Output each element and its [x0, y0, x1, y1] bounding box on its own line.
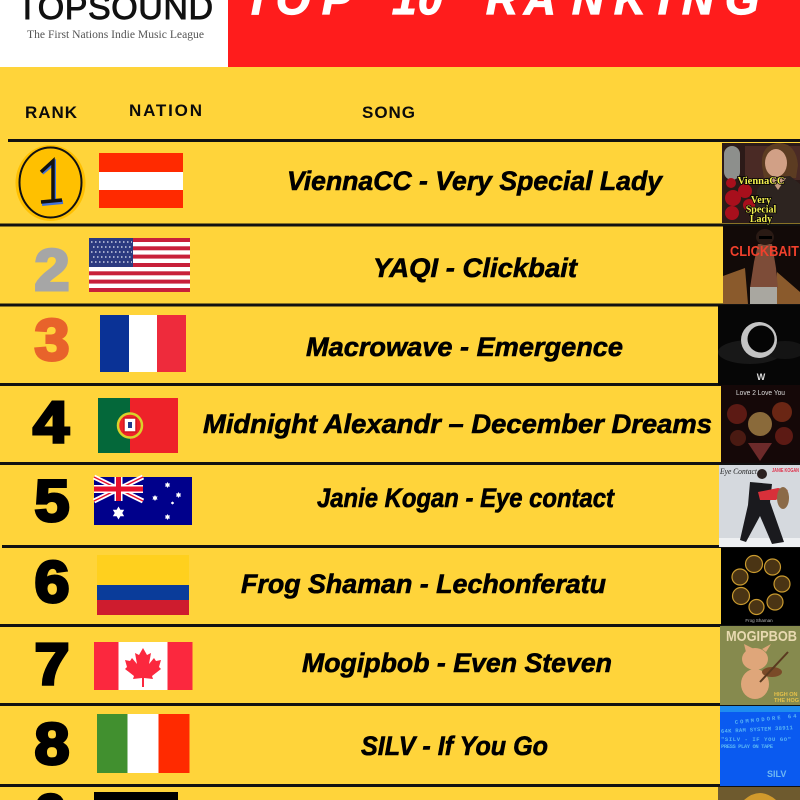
song: ViennaCC: ViennaCC - Very Special Lady: [287, 166, 663, 196]
row 7: Mogipbob: [34, 626, 800, 705]
column headers: RANK: [25, 103, 78, 122]
album art: ViennaCC: Special: [746, 204, 776, 216]
row 4: Midnight Alexandr: [33, 385, 800, 463]
rank 3: 3: [34, 308, 70, 373]
song: Janie Kogan: Janie Kogan - Eye contact: [317, 483, 615, 513]
album art: Emergence: W: [757, 372, 766, 382]
logo panel: The First Nations Indie Music League: [27, 27, 204, 41]
rank 5: 5: [34, 469, 70, 534]
album art: Eye Contact: Eye Contact: [719, 467, 758, 476]
song: Midnight Alexandr: Midnight Alexandr – December Dreams: [203, 409, 712, 439]
flag: Italy: [97, 714, 190, 773]
song: Frog Shaman: Frog Shaman - Lechonferatu: [241, 569, 606, 599]
song: SILV: SILV - If You Go: [361, 731, 548, 761]
album art: If You Go: [720, 706, 800, 786]
album art: Clickbait: [723, 226, 800, 304]
row 9: album art, partly visible: [718, 787, 800, 800]
row 1: ViennaCC: [16, 143, 800, 225]
album art: Eye Contact: [719, 465, 800, 547]
rank 8: 8: [34, 712, 70, 777]
flag: France: [100, 315, 186, 372]
logo panel: [0, 0, 228, 67]
album art: Mogipbob: THE HOG: [774, 698, 799, 704]
flag: Austria: [99, 153, 183, 208]
album art: Love 2 Love You: [721, 385, 800, 463]
rank 2: 2: [34, 238, 70, 303]
rank 4: 4: [33, 390, 69, 455]
album art: Lechonferatu: [721, 548, 800, 625]
row 6: Frog Shaman: [34, 548, 800, 625]
flag: Canada: [94, 642, 192, 690]
row 9: flag, partly visible: [94, 792, 178, 800]
column headers: NATION: [129, 101, 202, 120]
song: Mogipbob: Mogipbob - Even Steven: [302, 648, 612, 678]
album art: Emergence: [718, 305, 800, 385]
row 5: Janie Kogan: [34, 465, 800, 547]
album art: If You Go: "SILV - IF YOU GO": [721, 736, 791, 743]
album art: Mogipbob: HIGH ON: [774, 692, 798, 698]
row 3: Macrowave: [34, 305, 800, 385]
album art: Mogipbob: [720, 626, 800, 705]
album art: If You Go: 64K RAM SYSTEM 38911: [721, 724, 794, 735]
flag: Colombia: [97, 555, 189, 615]
album art: If You Go: PRESS PLAY ON TAPE: [721, 743, 774, 750]
rank 6: 6: [34, 550, 70, 615]
column headers: SONG: [362, 103, 415, 122]
album art: If You Go: COMMODORE 64: [734, 712, 798, 726]
column headers: [25, 101, 415, 122]
album art: ViennaCC: Very: [751, 195, 771, 206]
album art: ViennaCC: ViennaCC: [738, 176, 784, 187]
album art: If You Go: SILV: [767, 769, 786, 779]
title banner: [228, 0, 800, 67]
album art: ViennaCC: Lady: [750, 214, 772, 225]
album art: Lechonferatu: Frog Shaman: [745, 618, 773, 623]
flag: USA: [89, 238, 190, 292]
flag: Australia: [94, 477, 192, 525]
song: Macrowave: Macrowave - Emergence: [306, 332, 623, 362]
row 8: SILV: [34, 706, 800, 786]
album art: Love 2 Love You: Love 2 Love You: [736, 390, 785, 397]
flag: Portugal: [98, 398, 178, 453]
song: YAQI: YAQI - Clickbait: [373, 253, 578, 283]
rank 1 badge: [16, 145, 86, 221]
row 2: YAQI: [34, 226, 800, 304]
album art: ViennaCC: [722, 143, 800, 225]
rank 7: 7: [34, 632, 70, 697]
